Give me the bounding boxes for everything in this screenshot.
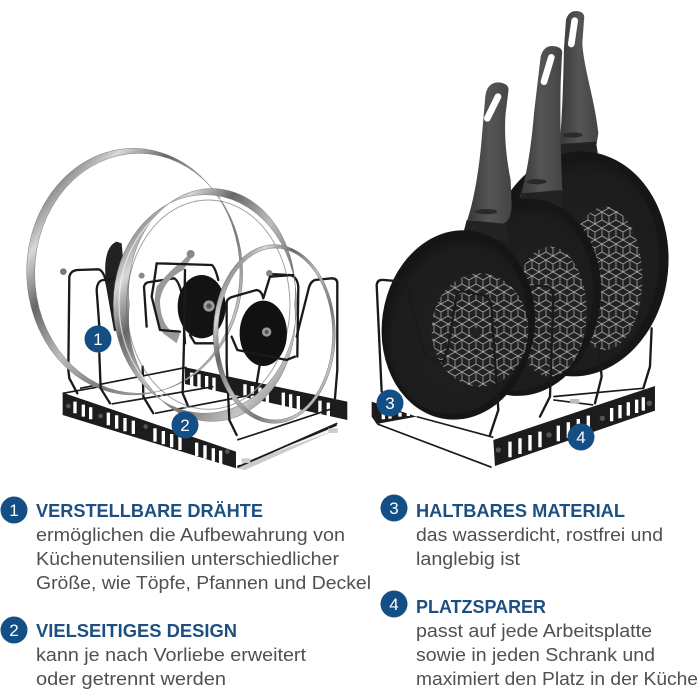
badge 3 on rack <box>376 390 404 416</box>
badge 3 on rack: 3 <box>385 394 395 413</box>
body 3: das wasserdicht, rostfrei und <box>416 525 663 545</box>
middle pan handle <box>520 46 562 207</box>
body 2 <box>36 645 306 689</box>
body 4: maximiert den Platz in der Küche <box>416 669 698 689</box>
small glass lid <box>213 245 335 423</box>
badge 4 on rack: 4 <box>576 428 586 447</box>
photo: rack with pot lids <box>27 148 347 470</box>
wire frames <box>377 280 652 435</box>
medium glass lid <box>113 189 297 421</box>
body 4: sowie in jeden Schrank und <box>416 645 655 665</box>
front wire frames <box>227 275 295 435</box>
number badge 3: 3 <box>389 499 399 518</box>
badge 1 on rack <box>84 326 112 352</box>
number badge 4: 4 <box>389 595 399 614</box>
feature 1: adjustable wires <box>0 496 371 593</box>
body 4: passt auf jede Arbeitsplatte <box>416 621 652 641</box>
badge 2 on rack <box>172 412 198 438</box>
body 4 <box>416 621 698 689</box>
wire frame in front of large lid <box>97 278 118 403</box>
body 1: ermöglichen die Aufbewahrung von <box>36 525 345 545</box>
knob behind large lid <box>105 242 128 330</box>
badge 4 on rack <box>568 424 594 450</box>
number badge 1 <box>0 496 28 524</box>
back rail <box>185 367 347 420</box>
number badge 1: 1 <box>9 501 19 520</box>
body 3 <box>416 525 663 569</box>
body 2: oder getrennt werden <box>36 669 226 689</box>
middle pan <box>433 189 614 406</box>
front rail <box>63 393 236 468</box>
badge 1 on rack: 1 <box>93 330 103 349</box>
body 1 <box>36 525 371 593</box>
large pan <box>475 142 680 386</box>
feature 3: durable material <box>380 494 663 569</box>
floor rods <box>63 367 337 467</box>
number badge 2 <box>0 616 28 644</box>
front pan handle <box>463 82 512 242</box>
large glass lid <box>27 148 243 395</box>
number badge 3 <box>380 494 408 522</box>
body 1: Küchenutensilien unterschiedlicher <box>36 549 339 569</box>
heading 4: PLATZSPARER <box>416 597 546 617</box>
medium lid knob <box>154 250 226 343</box>
feature 4: space saver <box>380 590 698 689</box>
heading 1: VERSTELLBARE DRÄHTE <box>36 501 263 521</box>
small lid knob <box>240 270 287 366</box>
clamp <box>570 399 579 404</box>
medium frames <box>152 263 218 407</box>
left rail <box>372 402 417 424</box>
body 1: Größe, wie Töpfe, Pfannen und Deckel <box>36 573 371 593</box>
number badge 2: 2 <box>9 621 19 640</box>
body 2: kann je nach Vorliebe erweitert <box>36 645 306 665</box>
front pan <box>370 220 547 430</box>
front rail <box>493 386 655 466</box>
body 3: langlebig ist <box>416 549 520 569</box>
heading 2: VIELSEITIGES DESIGN <box>36 621 237 641</box>
large pan handle <box>558 11 598 157</box>
back wire frames <box>68 269 337 413</box>
right side rail end <box>236 423 343 470</box>
number badge 4 <box>380 590 408 618</box>
feature 2: versatile design <box>0 616 306 689</box>
floor rods <box>377 388 643 467</box>
badge 2 on rack: 2 <box>180 416 190 435</box>
heading 3: HALTBARES MATERIAL <box>416 501 625 521</box>
photo: rack with pans <box>370 11 680 467</box>
